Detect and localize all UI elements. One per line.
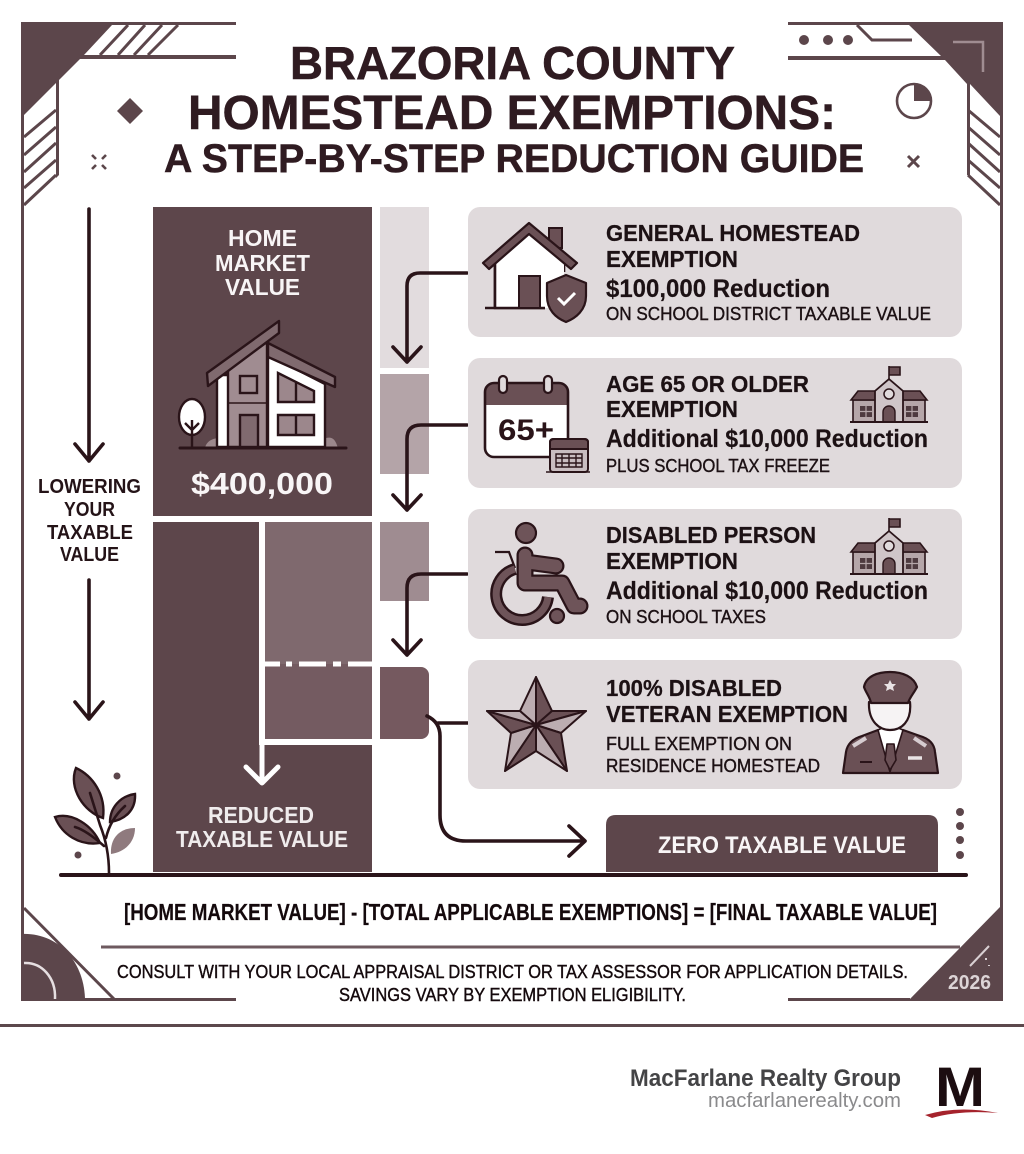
text: age 65: AGE 65 OR OLDER — [606, 371, 809, 397]
heading: home market value: VALUE — [225, 274, 300, 300]
icon: star — [487, 677, 586, 771]
label: lowering your taxable value: TAXABLE — [47, 522, 133, 544]
label: reduced taxable value — [176, 802, 348, 852]
icon: veteran officer — [843, 672, 938, 773]
text: veteran: RESIDENCE HOMESTEAD — [606, 756, 820, 776]
panel: home market value — [153, 207, 372, 516]
reduction strip 1 — [380, 207, 429, 368]
title: BRAZORIA COUNTY — [290, 37, 735, 89]
brand url: macfarlanerealty.com — [708, 1090, 901, 1112]
icon: wheelchair — [495, 523, 580, 623]
title — [164, 37, 864, 181]
text: disabled person: DISABLED PERSON — [606, 522, 816, 548]
icon: right cross — [908, 156, 919, 167]
heading: home market value: MARKET — [215, 250, 310, 276]
icon: school — [850, 518, 928, 574]
icon: house with shield — [483, 223, 586, 322]
text: disabled person — [606, 522, 928, 627]
logo — [925, 1055, 998, 1118]
brand name: MacFarlane Realty Group — [630, 1065, 901, 1092]
label: lowering your taxable value: YOUR — [64, 499, 115, 521]
value: $400,000: $400,000 — [191, 466, 333, 501]
text: disabled person: Additional $10,000 Reduction — [606, 577, 928, 605]
text: general homestead — [606, 220, 931, 324]
reduction strip 3 — [380, 522, 429, 601]
card: age 65 or older exemption — [468, 358, 962, 488]
card: general homestead exemption — [468, 207, 962, 337]
label: lowering your taxable value: VALUE — [60, 544, 119, 566]
icon: modern house — [179, 321, 346, 448]
card: 100% disabled veteran exemption — [468, 660, 962, 789]
title: A STEP-BY-STEP REDUCTION GUIDE — [164, 137, 864, 181]
arrow: white downward — [246, 522, 278, 783]
disclaimer: CONSULT WITH YOUR LOCAL APPRAISAL DISTRICT OR TAX ASSESSOR FOR APPLICATION DETAILS. — [117, 962, 908, 982]
footer rule — [0, 1024, 1024, 1027]
text: age 65: Additional $10,000 Reduction — [606, 425, 928, 453]
text: general homestead: EXEMPTION — [606, 246, 738, 272]
arrow: general homestead connector — [393, 273, 467, 362]
icon: school — [850, 366, 928, 422]
text: veteran: 100% DISABLED — [606, 675, 782, 701]
text: age 65: EXEMPTION — [606, 396, 738, 422]
text: veteran: VETERAN EXEMPTION — [606, 701, 848, 727]
label: reduced taxable value: REDUCED — [208, 802, 314, 828]
box: zero taxable value — [606, 815, 938, 872]
icon: calendar 65+: 65+ — [498, 414, 554, 447]
icon: left sparkle — [92, 155, 106, 169]
dots: vertical — [956, 808, 964, 859]
heading: home market value — [215, 225, 310, 300]
arrow: disabled person connector — [393, 574, 467, 655]
text: general homestead: $100,000 Reduction — [606, 275, 830, 303]
card: disabled person exemption — [468, 509, 962, 639]
text: age 65: PLUS SCHOOL TAX FREEZE — [606, 456, 830, 476]
year label: 2026 — [948, 972, 991, 994]
panel: reduced taxable value block — [153, 522, 372, 872]
text: disabled person: EXEMPTION — [606, 548, 738, 574]
disclaimer — [117, 962, 908, 1005]
label: lowering your taxable value: LOWERING — [38, 476, 141, 498]
text: general homestead: ON SCHOOL DISTRICT TAXABLE VALUE — [606, 304, 931, 324]
icon: pie — [897, 84, 931, 118]
text: veteran: FULL EXEMPTION ON — [606, 734, 792, 754]
icon: calendar 65+ — [485, 376, 590, 472]
heading: home market value: HOME — [228, 225, 297, 251]
arrow: veteran connector to zero value — [427, 716, 585, 856]
box: zero taxable value: ZERO TAXABLE VALUE — [658, 832, 906, 859]
logo: M — [935, 1055, 985, 1118]
text: age 65 — [606, 371, 928, 476]
title: HOMESTEAD EXEMPTIONS: — [188, 87, 836, 140]
icon: plant — [55, 768, 135, 873]
arrow: upper left downward — [75, 209, 103, 461]
divider — [101, 946, 960, 948]
disclaimer: SAVINGS VARY BY EXEMPTION ELIGIBILITY. — [339, 985, 686, 1005]
reduction strip 2 — [380, 374, 429, 474]
reduction strip 4 — [380, 667, 429, 739]
text: general homestead: GENERAL HOMESTEAD — [606, 220, 860, 246]
icon: diamond — [117, 98, 143, 124]
label: reduced taxable value: TAXABLE VALUE — [176, 826, 348, 852]
label: lowering your taxable value — [38, 476, 141, 566]
text: veteran — [606, 675, 848, 776]
arrow: lower left downward — [75, 580, 103, 719]
arrow: age 65 connector — [393, 425, 467, 510]
baseline — [61, 873, 966, 877]
text: disabled person: ON SCHOOL TAXES — [606, 607, 766, 627]
